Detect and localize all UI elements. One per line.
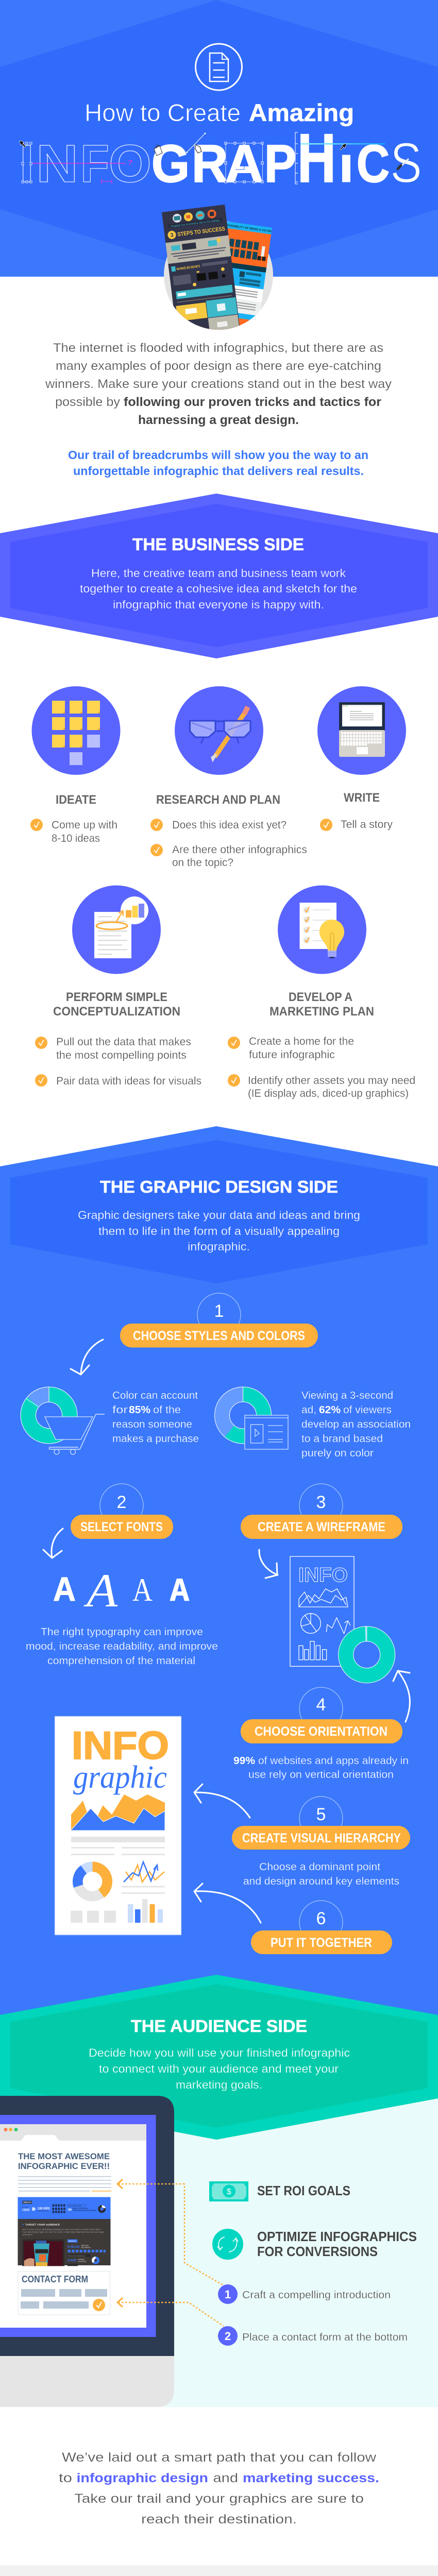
checklist: write [320, 819, 393, 831]
heading: optimize infographics: FOR CONVERSIONS [257, 2244, 378, 2259]
heading: develop a marketing plan: MARKETING PLAN [269, 1005, 374, 1019]
list item 1 [218, 2284, 391, 2304]
text: 62 percent stat: of viewers [343, 1404, 392, 1416]
pill: create visual hierarchy [232, 1826, 410, 1850]
step 2: select fonts: 2 [117, 1493, 126, 1512]
step 5: create visual hierarchy [194, 1784, 410, 1887]
text: orientation stat: of websites and apps already in [258, 1755, 409, 1767]
sample infographic: dark steps to success: 3 [170, 232, 174, 239]
sample infographic: orange and sky blue: POSSIBILITY OF BEING A VICTIM [226, 224, 272, 233]
pill: put it together: PUT IT TOGETHER [271, 1936, 372, 1950]
chart: area [71, 1794, 165, 1830]
intro text block [45, 341, 392, 427]
title word: INFOGRAPHICS: I [339, 147, 353, 191]
text: audience description [89, 2046, 350, 2091]
list item 2: 2 [225, 2330, 231, 2343]
text: orientation stat: use rely on vertical orientation [248, 1769, 394, 1781]
panel: write [317, 686, 406, 831]
icon: refresh circle [212, 2229, 243, 2260]
closing text block: and [213, 2471, 238, 2485]
text: orientation stat: 99% [233, 1755, 255, 1767]
text placeholder lines [71, 1837, 165, 1923]
arrow: to color stats [71, 1340, 103, 1375]
dotted connector: contact form [117, 2298, 224, 2326]
sample infographic: orange and sky blue [201, 222, 272, 330]
intro callout in blue: unforgettable infographic that delivers real results. [73, 464, 364, 478]
title word: INFOGRAPHICS: F [80, 134, 109, 193]
checklist: conceptualization [35, 1036, 201, 1087]
intro text block: harnessing a great design. [138, 413, 299, 427]
panel: ideate [30, 686, 121, 844]
wireframe illustration: INFO [298, 1564, 348, 1586]
checklist: research: Are there other infographics [172, 844, 307, 856]
title word: INFOGRAPHICS: N [36, 134, 78, 193]
pill: choose styles and colors [120, 1324, 318, 1348]
web page heading: THE MOST AWESOME [18, 2151, 110, 2161]
text: 62 percent stat: to a brand based [301, 1433, 383, 1445]
step 3: create a wireframe [241, 1484, 402, 1683]
title word: INFOGRAPHICS: S [390, 131, 422, 195]
embedded infographic: Ben & Jerry's ran an advertising campaign for their new Scotcho Scotch Scotch flavor. [22, 2228, 102, 2230]
pill: choose styles and colors: CHOOSE STYLES AND COLORS [133, 1329, 305, 1343]
title word: INFOGRAPHICS: O [109, 134, 151, 193]
checklist: marketing [228, 1036, 415, 1099]
title line [85, 99, 354, 126]
embedded infographic: 3 DAYS [22, 2209, 29, 2212]
step 6: put it together [194, 1884, 392, 1954]
checklist: marketing: future infographic [249, 1049, 335, 1061]
illustration: desktop monitor [0, 2096, 174, 2407]
embedded infographic: Ben & Jerry's experienced a [69, 2255, 86, 2257]
step 5: create visual hierarchy: 5 [316, 1805, 326, 1824]
step 3: create a wireframe: 3 [316, 1493, 326, 1512]
text: 85 percent stat: reason someone [112, 1419, 192, 1430]
text: graphic design description: Graphic designers take your data and ideas and bring [78, 1209, 360, 1222]
embedded infographic: INCREASE [78, 2259, 85, 2261]
heading: set roi goals: SET ROI GOALS [257, 2183, 350, 2198]
text: 62 percent stat: develop an association [301, 1419, 411, 1430]
heading: perform simple conceptualization: PERFORM SIMPLE [66, 990, 167, 1004]
text: 62 percent stat [301, 1390, 411, 1459]
arrow: to wireframe [259, 1550, 278, 1578]
embedded infographic: Four advertising images ran over the course of eight days targeting American users ages [22, 2231, 105, 2233]
text: hierarchy description: and design around key elements [243, 1876, 399, 1887]
icon: dollar bill: $ [227, 2188, 231, 2196]
checklist: write: Tell a story [341, 819, 393, 831]
panel: hero header [0, 0, 438, 355]
script word: graphic: graphic [73, 1760, 167, 1795]
list item 2: Place a contact form at the bottom [242, 2332, 408, 2343]
closing text block: to [59, 2471, 72, 2485]
chart: teal donut [339, 1626, 395, 1683]
checklist: marketing: Identify other assets you may need [248, 1075, 415, 1087]
font samples: A [132, 1572, 153, 1608]
closing text block: marketing success. [243, 2471, 379, 2485]
finished infographic page [55, 1716, 181, 1935]
intro callout in blue [68, 448, 368, 478]
checklist: ideate: 8-10 ideas [52, 833, 100, 844]
sample infographic: dark steps to success: MAXIMIZE SEO REPORTS [176, 265, 200, 271]
checklist: research: on the topic? [172, 857, 233, 869]
panel: graphic design side background [0, 1126, 438, 2015]
title line: How to Create [85, 99, 241, 126]
list item 1: Craft a compelling introduction [242, 2290, 391, 2301]
heading: INFO: INFO [72, 1724, 169, 1768]
checklist: conceptualization: Pair data with ideas for visuals [56, 1075, 201, 1087]
pill: create a wireframe [241, 1515, 402, 1539]
font samples: A [83, 1564, 118, 1617]
pill: create a wireframe: CREATE A WIREFRAME [258, 1520, 385, 1534]
text: audience description: marketing goals. [176, 2078, 262, 2091]
web page text lines [18, 2176, 111, 2192]
icon: dollar bill [209, 2181, 248, 2201]
embedded infographic: MORE FOLLOWERS ON [73, 2208, 88, 2210]
closing text block: infographic design [76, 2471, 208, 2485]
panel: research and plan [150, 686, 307, 869]
text: hierarchy description: Choose a dominant point [259, 1861, 380, 1873]
embedded infographic: TARGET YOUR AUDIENCE [25, 2224, 60, 2226]
text: typography description: comprehension of the material [47, 1655, 195, 1667]
checklist: conceptualization: Pull out the data that makes [56, 1036, 191, 1048]
checklist: ideate [30, 819, 117, 844]
panel: business side banner [0, 494, 438, 658]
pill: choose orientation [241, 1719, 402, 1743]
embedded infographic: 18 through 35. [22, 2233, 33, 2235]
text: audience description: Decide how you will use your finished infographic [89, 2046, 350, 2059]
icon: paint bucket [154, 145, 162, 156]
embedded infographic [18, 2197, 110, 2266]
icon: video window [245, 1415, 288, 1449]
arrow: step 5 to infographic [194, 1784, 250, 1818]
icon: sticky notes [32, 686, 121, 775]
embedded infographic: RESULTS [69, 2240, 76, 2242]
title word: INFOGRAPHICS: H [297, 120, 336, 197]
heading: the audience side: THE AUDIENCE SIDE [131, 2016, 307, 2036]
text: 62 percent stat: ad, [301, 1404, 316, 1416]
text: graphic design description [78, 1209, 360, 1253]
icon: checklist and light bulb [278, 885, 366, 974]
checklist: ideate: Come up with [52, 819, 117, 831]
step 1: choose styles and colors [20, 1293, 411, 1459]
title line: Amazing [249, 99, 354, 126]
web page heading [18, 2151, 110, 2171]
checklist: marketing: (IE display ads, diced-up graphics) [248, 1088, 409, 1099]
text: 85 percent stat: makes a purchase [112, 1433, 199, 1445]
heading: perform simple conceptualization: CONCEPTUALIZATION [53, 1005, 180, 1019]
text: 85 percent stat: for [112, 1404, 128, 1416]
checklist: conceptualization: the most compelling points [56, 1049, 187, 1061]
text: typography description: mood, increase readability, and improve [26, 1641, 218, 1652]
contact form [18, 2271, 110, 2315]
embedded infographic: THEIR INSTAGRAM ACCOUNT [73, 2210, 96, 2212]
heading: optimize infographics: OPTIMIZE INFOGRAPHICS [257, 2229, 417, 2244]
closing text block: Take our trail and your graphics are sure to [74, 2492, 364, 2506]
sample infographic: dark steps to success: Prepping Your eCommerce Site for the Holidays [171, 219, 220, 228]
text: typography description [26, 1626, 218, 1667]
chart: zigzag lines [124, 1862, 164, 1882]
heading: write: WRITE [344, 791, 380, 805]
heading: develop a marketing plan: DEVELOP A [289, 990, 352, 1004]
web page heading: INFOGRAPHIC EVER!! [18, 2161, 110, 2171]
text: business description [80, 567, 357, 611]
embedded infographic: 9.0 MILLION [68, 2245, 79, 2249]
intro text block: The internet is flooded with infographics, but there are as [53, 341, 383, 355]
title word: INFOGRAPHICS: G [151, 134, 190, 193]
panel: audience side banner [0, 1975, 438, 2140]
icon: annotated document with chart [72, 885, 161, 974]
icon: pen tool [195, 145, 201, 153]
font samples: A [53, 1570, 76, 1608]
step 4: choose orientation: 4 [316, 1695, 326, 1715]
closing text block: We’ve laid out a smart path that you can follow [62, 2450, 377, 2465]
heading: research and plan: RESEARCH AND PLAN [156, 793, 280, 807]
embedded infographic: RESULTS [23, 2201, 31, 2204]
icon: glasses and pencil [175, 686, 263, 775]
embedded infographic: USERS SAW [81, 2245, 89, 2247]
heading: perform simple conceptualization [53, 990, 180, 1019]
embedded infographic: and Instagram gained [69, 2205, 82, 2207]
intro text block: many examples of poor design as there are eye-catching [56, 359, 381, 373]
embedded infographic: THE CAMPAIGN [81, 2247, 91, 2248]
heading: ideate: IDEATE [56, 793, 96, 807]
pill: choose orientation: CHOOSE ORIENTATION [255, 1724, 388, 1739]
pill: select fonts [71, 1515, 173, 1539]
sample infographic: dark steps to success: STEPS TO SUCCESS [177, 226, 226, 238]
checklist: marketing: Create a home for the [249, 1036, 354, 1047]
text: business description: Here, the creative team and business team work [91, 567, 346, 580]
text: 85 percent stat: of the [153, 1404, 181, 1416]
sample infographic: dark steps to success [162, 205, 240, 330]
contact form: CONTACT FORM [22, 2274, 88, 2284]
panel: pale background behind audience content [0, 2098, 438, 2407]
step 2: select fonts [26, 1484, 218, 1667]
closing text block: reach their destination. [141, 2512, 297, 2527]
font samples [53, 1564, 190, 1617]
font samples: A [170, 1574, 190, 1611]
embedded infographic: 20% [68, 2209, 72, 2212]
arrow: to wireframe from orientation [393, 1671, 410, 1722]
chart: bars [128, 1899, 163, 1923]
arrow: step 6 to infographic [194, 1884, 261, 1923]
text: orientation stat [233, 1755, 409, 1781]
title word: INFOGRAPHICS [20, 120, 422, 197]
icon: paint brush [398, 159, 409, 169]
embedded infographic: IN AD RECALL [78, 2261, 87, 2263]
chart: donut with cart [20, 1386, 105, 1454]
icon: document in circle [196, 44, 242, 90]
text: 62 percent stat: purely on color [301, 1448, 374, 1459]
checklist: research [150, 819, 307, 869]
heading: optimize infographics [257, 2229, 417, 2259]
text: audience description: to connect with your audience and meet your [99, 2062, 339, 2075]
dotted connector: intro [117, 2179, 224, 2285]
embedded infographic: IN JUST [22, 2206, 28, 2208]
icon: shopping cart [45, 1414, 105, 1454]
title word: INFOGRAPHICS: C [357, 134, 390, 193]
heading: the business side: THE BUSINESS SIDE [132, 535, 304, 554]
list item 1: 1 [225, 2288, 231, 2301]
title word: INFOGRAPHICS: A [225, 134, 263, 193]
arrow: to font samples [43, 1529, 63, 1558]
text: 62 percent stat: Viewing a 3-second [301, 1390, 393, 1401]
intro text block: winners. Make sure your creations stand out in the best way [45, 377, 392, 391]
heading: develop a marketing plan [269, 990, 374, 1019]
icon: cursors [20, 141, 347, 150]
step 4: choose orientation [233, 1671, 410, 1781]
list item 2 [218, 2326, 408, 2346]
icon: laptop [317, 686, 406, 775]
embedded infographic: 33-POINT [68, 2259, 77, 2262]
title word: INFOGRAPHICS: I [20, 134, 34, 193]
chart: donut [72, 1861, 113, 1902]
text: 62 percent stat: 62% [319, 1404, 341, 1416]
text: graphic design description: infographic. [188, 1240, 250, 1253]
title word: INFOGRAPHICS: P [264, 134, 296, 193]
step 1: choose styles and colors: 1 [214, 1301, 224, 1321]
intro callout in blue: Our trail of breadcrumbs will show you the way to an [68, 448, 368, 462]
embedded infographic: PARTICIPATED [38, 2210, 49, 2212]
text: 85 percent stat [112, 1390, 199, 1445]
closing text block [59, 2450, 379, 2527]
text: 85 percent stat: Color can account [112, 1390, 198, 1401]
intro text block: following our proven tricks and tactics for [124, 395, 381, 409]
heading: the graphic design side: THE GRAPHIC DESIGN SIDE [100, 1177, 338, 1196]
wireframe illustration [290, 1556, 395, 1683]
pill: put it together [251, 1930, 392, 1954]
pill: select fonts: SELECT FONTS [80, 1520, 163, 1534]
text: 85 percent stat: 85% [129, 1404, 150, 1416]
title word: INFOGRAPHICS: R [192, 134, 228, 193]
text: typography description: The right typography can improve [41, 1626, 203, 1638]
checklist: research: Does this idea exist yet? [172, 819, 287, 831]
panel: perform simple conceptualization [35, 885, 201, 1087]
text: graphic design description: them to life in the form of a visually appealing [98, 1225, 340, 1238]
chart: donut with video window [214, 1386, 288, 1449]
panel: footer logo bar [0, 2565, 438, 2576]
hero image: sample infographics [162, 205, 273, 330]
design tool marks on title [22, 132, 385, 184]
pill: create visual hierarchy: CREATE VISUAL HIERARCHY [242, 1831, 401, 1845]
embedded infographic: 1,500 USERS [38, 2207, 50, 2210]
text: hierarchy description [243, 1861, 399, 1887]
step 6: put it together: 6 [316, 1909, 326, 1928]
browser bar [0, 2124, 146, 2141]
text: business description: infographic that everyone is happy with. [113, 598, 324, 611]
text: business description: together to create a cohesive idea and sketch for the [80, 582, 357, 595]
panel: develop a marketing plan [228, 885, 415, 1099]
intro text block: possible by [55, 395, 120, 409]
